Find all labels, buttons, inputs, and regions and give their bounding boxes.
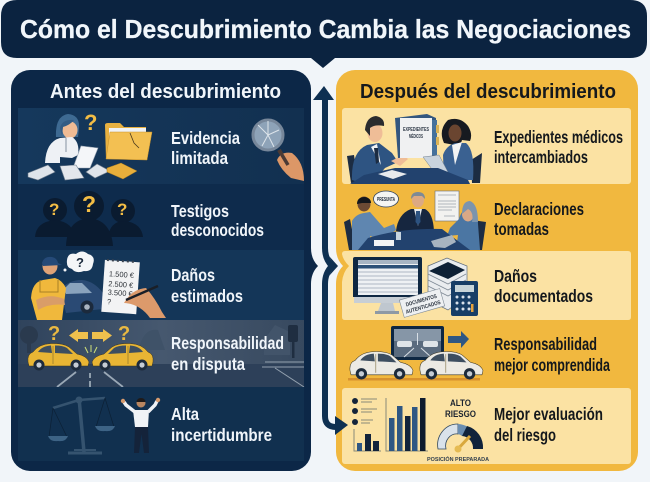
row: expedientes médicos bbox=[342, 108, 631, 184]
icon: unknown witnesses silhouettes: ? bbox=[117, 200, 127, 219]
row: daños documentados bbox=[342, 251, 631, 320]
icon: unknown witnesses silhouettes: ? bbox=[49, 200, 59, 219]
heading: antes: Antes del descubrimiento bbox=[50, 81, 281, 103]
icon: worker, car, notepad and hand: 2.500 € bbox=[108, 279, 134, 290]
label: en disputa bbox=[171, 354, 245, 374]
panel: antes del descubrimiento bbox=[11, 70, 318, 471]
icon: tablet and white cars bbox=[348, 326, 483, 380]
label: limitada bbox=[171, 148, 228, 168]
label: incertidumbre bbox=[171, 425, 272, 445]
icon: monitor, documents and calculator: DOCUMENTOS bbox=[405, 294, 438, 308]
row: responsabilidad en disputa bbox=[18, 320, 304, 387]
label: estimados bbox=[171, 286, 243, 306]
icon: risk gauge bbox=[427, 398, 490, 463]
icon: worker, car, notepad and hand: 1.500 € bbox=[109, 269, 135, 280]
icon: deposition meeting: PRESUNTA bbox=[377, 197, 395, 203]
icon: worker, car, notepad and hand: ? bbox=[76, 255, 84, 270]
icon: lawyers exchanging medical files: MÉDICOS bbox=[409, 132, 423, 140]
icon: magnifying glass bbox=[253, 120, 304, 181]
label: Testigos bbox=[171, 201, 229, 221]
title banner bbox=[1, 0, 647, 68]
title banner: Cómo el Descubrimiento Cambia las Negociaciones bbox=[20, 14, 631, 44]
row: evidencia limitada bbox=[18, 108, 304, 184]
row: declaraciones tomadas bbox=[344, 191, 584, 250]
icon: shrugging man bbox=[121, 398, 160, 453]
row: daños estimados bbox=[18, 250, 304, 320]
icon: woman with papers and folder bbox=[28, 110, 152, 180]
label: documentados bbox=[494, 286, 593, 306]
icon: deposition meeting bbox=[344, 191, 486, 250]
icon: unknown witnesses silhouettes: ? bbox=[82, 191, 96, 217]
label: Responsabilidad bbox=[171, 333, 284, 353]
icon: disputed collision scene: ? bbox=[118, 323, 130, 345]
icon: bullet list and small bars bbox=[352, 398, 381, 451]
label: Declaraciones bbox=[494, 199, 584, 219]
label: Responsabilidad bbox=[494, 334, 597, 354]
label: tomadas bbox=[494, 219, 549, 239]
icon: disputed collision scene: ? bbox=[48, 323, 60, 345]
bar chart bbox=[386, 398, 428, 451]
icon: woman with papers and folder: ? bbox=[84, 110, 97, 135]
icon: worker, car, notepad and hand: ? bbox=[107, 297, 111, 306]
row: mejor evaluación del riesgo bbox=[342, 388, 631, 464]
row: testigos desconocidos bbox=[18, 184, 304, 250]
icon: risk gauge: POSICIÓN PREPARADA bbox=[427, 455, 490, 463]
label: del riesgo bbox=[494, 425, 556, 445]
heading: después: Después del descubrimiento bbox=[360, 81, 616, 103]
icon: worker, car, notepad and hand bbox=[31, 252, 166, 320]
icon: worker, car, notepad and hand: 3.500 € bbox=[107, 288, 134, 298]
icon: risk gauge: RIESGO bbox=[445, 409, 476, 420]
icon: lawyers exchanging medical files: EXPEDIENTES bbox=[403, 127, 429, 133]
icon: monitor, documents and calculator: AUTENTICADOS bbox=[405, 300, 442, 316]
label: Mejor evaluación bbox=[494, 404, 603, 424]
icon: scales of justice bbox=[48, 396, 115, 453]
label: desconocidos bbox=[171, 220, 264, 240]
icon: disputed collision scene bbox=[20, 323, 304, 387]
label: Daños bbox=[171, 265, 215, 285]
label: intercambiados bbox=[494, 147, 588, 167]
icon: monitor, documents and calculator bbox=[353, 257, 478, 317]
label: Alta bbox=[171, 404, 199, 424]
panel: después del descubrimiento bbox=[335, 70, 638, 471]
row: alta incertidumbre bbox=[18, 387, 304, 461]
icon: lawyers exchanging medical files bbox=[347, 114, 482, 184]
label: Daños bbox=[494, 266, 537, 286]
label: Evidencia bbox=[171, 128, 240, 148]
row: responsabilidad mejor comprendida bbox=[348, 326, 610, 380]
icon: unknown witnesses silhouettes bbox=[35, 191, 143, 246]
icon: risk gauge: ALTO bbox=[450, 398, 471, 409]
arrow: transition bracket bbox=[313, 86, 348, 435]
